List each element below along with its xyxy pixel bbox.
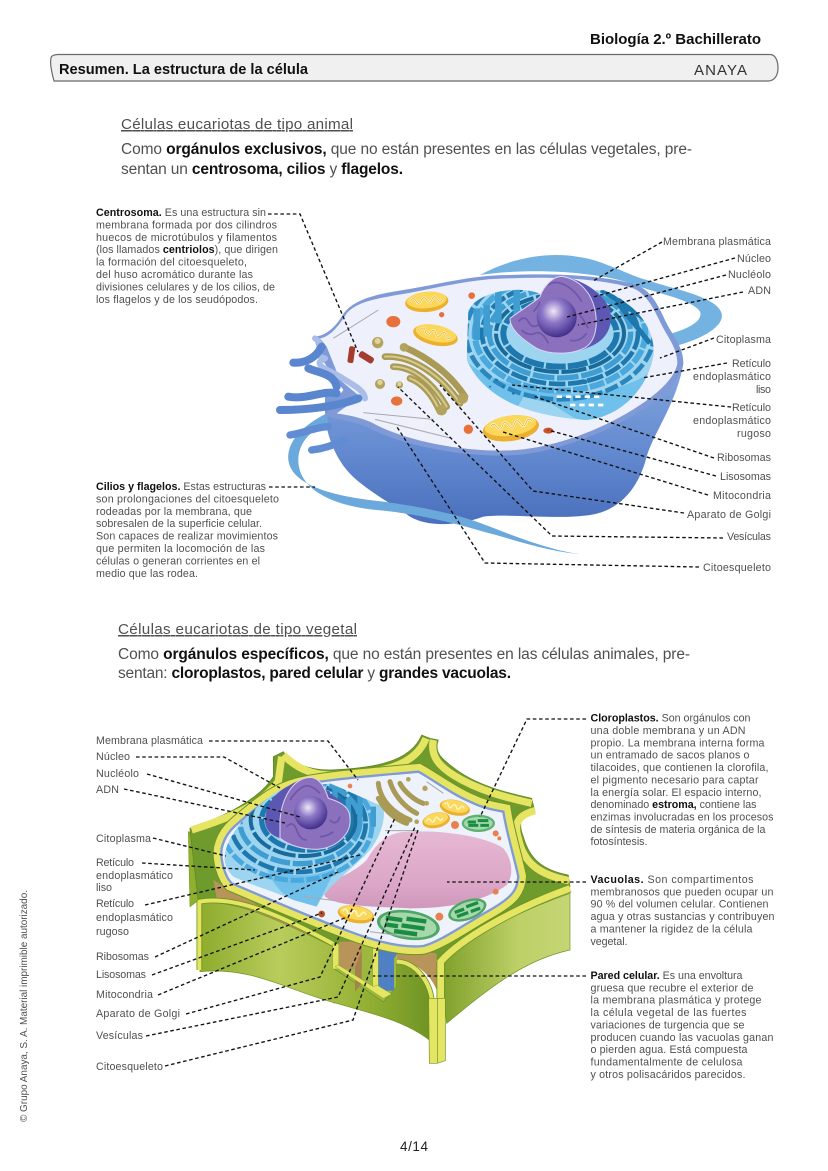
text block: cloroplastos: el pigmento necesario para captar	[590, 774, 759, 786]
text block: pared celular: la célula vegetal de las fuertes	[590, 1007, 746, 1019]
text block: cilios y flagelos: células o generan corrientes en el	[96, 555, 260, 567]
text block: vacuolas: 90 % del volumen celular. Contienen	[590, 899, 769, 911]
text block: cilios y flagelos: sobresalen de la superficie celular.	[96, 518, 262, 530]
illustration: plant cell	[188, 735, 570, 1063]
text block: cloroplastos: de síntesis de materia orgánica de la	[590, 824, 766, 836]
intro text: animal cells	[121, 141, 692, 178]
labels: animal cell: Núcleo	[737, 253, 771, 265]
chloroplasts	[375, 815, 495, 944]
cytoskeleton	[303, 782, 443, 937]
notch in wall	[333, 940, 407, 998]
labels: animal cell: Mitocondria	[713, 490, 771, 502]
olive backing behind notch	[333, 943, 397, 1003]
labels: plant cell: Ribosomas	[96, 951, 149, 963]
text block: pared celular: gruesa que recubre el exterior de	[590, 982, 754, 994]
labels: plant cell: Lisosomas	[96, 969, 146, 981]
nucleus	[265, 777, 350, 849]
labels: animal cell: endoplasmático	[693, 371, 771, 383]
text block: cilios y flagelos: Cilios y flagelos. Estas estructuras	[96, 481, 266, 493]
text block: cloroplastos: enzimas involucradas en los procesos	[590, 812, 774, 824]
text block: vacuolas: agua y otras sustancias y contribuyen	[590, 911, 775, 923]
vacuole	[323, 831, 511, 908]
header bar: Resumen. La estructura de la célula	[59, 62, 309, 78]
text block: vacuolas: membranosos que pueden ocupar un	[590, 886, 774, 898]
nucleus	[510, 277, 611, 353]
text block: centrosoma: (los llamados centriolos), que dirigen	[96, 244, 278, 256]
labels: plant cell: Retículo	[96, 857, 134, 869]
golgi apparatus	[385, 347, 465, 412]
labels: plant cell: endoplasmático	[96, 912, 173, 924]
text block: cloroplastos: tilacoides, que contienen la clorofila,	[590, 762, 769, 774]
front left panel	[198, 902, 430, 1040]
text block: vacuolas: Vacuolas. Son compartimentos	[590, 874, 754, 886]
header bar: ANAYA	[694, 62, 747, 79]
text block: centrosoma: los flagelos y de los seudópodos.	[96, 294, 258, 306]
text block: cloroplastos: una doble membrana y un ADN	[590, 725, 746, 737]
labels: animal cell: Aparato de Golgi	[687, 509, 771, 521]
heading: animal cells: Células eucariotas de tipo animal	[121, 116, 353, 133]
labels: plant cell: Citoplasma	[96, 833, 151, 845]
labels: animal cell: rugoso	[737, 428, 771, 440]
brown middle lamella	[213, 880, 437, 990]
labels: plant cell: Nucléolo	[96, 768, 139, 780]
copyright note: © Grupo Anaya, S. A. Material imprimible autorizado.	[19, 890, 30, 1122]
mitochondria	[336, 797, 471, 926]
labels: animal cell: Nucléolo	[728, 269, 771, 281]
labels: animal cell: liso	[756, 384, 771, 396]
labels: animal cell: Retículo	[732, 358, 771, 370]
page number: 4/14	[400, 1139, 428, 1154]
labels: plant cell: Núcleo	[96, 751, 130, 763]
labels: animal cell: Membrana plasmática	[663, 236, 771, 248]
text block: cilios y flagelos: son prolongaciones del citoesqueleto	[96, 493, 279, 505]
labels: animal cell: Lisosomas	[720, 471, 771, 483]
golgi apparatus	[378, 782, 423, 823]
text block: centrosoma: del huso acromático durante las	[96, 269, 253, 281]
text block: cilios y flagelos: Son capaces de realizar movimientos	[96, 531, 278, 543]
text block: pared celular: producen cuando las vacuolas ganan	[590, 1032, 774, 1044]
text block: pared celular: fundamentalmente de celulosa	[590, 1056, 743, 1068]
labels: animal cell: endoplasmático	[693, 415, 771, 427]
labels: plant cell: ADN	[96, 784, 119, 796]
page header: subject: Biología 2.º Bachillerato	[590, 31, 761, 48]
text block: pared celular: variaciones de turgencia que se	[590, 1019, 745, 1031]
text block: cilios y flagelos: rodeadas por la membrana, que	[96, 506, 252, 518]
text block: cloroplastos	[590, 713, 774, 848]
text block: cilios y flagelos: medio que las rodea.	[96, 568, 198, 580]
lysosomes and ribosomes	[318, 784, 501, 921]
text block: vacuolas: vegetal.	[590, 936, 628, 948]
text block: cloroplastos: denominado estroma, contiene las	[590, 799, 756, 811]
labels: animal cell: ADN	[748, 285, 771, 297]
front right panel	[440, 893, 570, 1023]
text block: centrosoma: membrana formada por dos cilindros	[96, 219, 277, 231]
leader lines: plant cell	[124, 719, 586, 1066]
text block: cilios y flagelos: que permiten la locomoción de las	[96, 543, 265, 555]
mitochondria	[404, 290, 541, 445]
text block: cloroplastos: un entramado de sacos planos o	[590, 750, 750, 762]
labels: plant cell: Retículo	[96, 898, 134, 910]
plasma membrane and cell interior	[221, 772, 518, 946]
labels: plant cell: Citoesqueleto	[96, 1061, 163, 1073]
leader lines: animal cell	[268, 214, 743, 567]
intro text: plant cells: sentan: cloroplastos, pared celular y grandes vacuolas.	[118, 665, 511, 682]
labels: animal cell: Vesículas	[727, 531, 771, 543]
lysosomes	[386, 292, 553, 434]
labels: plant cell: Mitocondria	[96, 989, 153, 1001]
endoplasmic reticulum	[224, 784, 384, 906]
intro text: plant cells	[118, 646, 690, 682]
text block: centrosoma: la formación del citoesqueleto,	[96, 257, 247, 269]
text block: centrosoma	[96, 207, 278, 306]
labels: animal cell: Ribosomas	[717, 452, 771, 464]
labels: plant cell: Vesículas	[96, 1030, 143, 1042]
cilia	[280, 338, 365, 410]
labels: plant cell: endoplasmático	[96, 870, 173, 882]
cytoskeleton	[333, 310, 452, 438]
text block: vacuolas: a mantener la rigidez de la célula	[590, 923, 753, 935]
text block: pared celular	[590, 970, 774, 1081]
endoplasmic reticulum	[466, 290, 654, 420]
text block: cloroplastos: la energía solar. El espacio interno,	[590, 787, 762, 799]
intro text: animal cells: Como orgánulos exclusivos, que no están presentes en las células vegetales, pre-	[121, 141, 692, 158]
left side panel	[188, 832, 218, 907]
text block: pared celular: o pierden agua. Está compuesta	[590, 1044, 748, 1056]
labels: plant cell: Membrana plasmática	[96, 735, 203, 747]
front wall yellow edges	[199, 888, 570, 998]
illustration: animal cell	[280, 255, 722, 554]
text block: cilios y flagelos	[96, 481, 279, 580]
top face of wall	[190, 735, 570, 960]
labels: plant cell: rugoso	[96, 926, 129, 938]
text block: cloroplastos: fotosíntesis.	[590, 836, 648, 848]
text block: pared celular: Pared celular. Es una envoltura	[590, 970, 743, 982]
text block: centrosoma: Centrosoma. Es una estructura sin	[96, 207, 266, 219]
labels: plant cell	[96, 735, 203, 1073]
text block: centrosoma: divisiones celulares y de los cilios, de	[96, 281, 275, 293]
text block: cloroplastos: Cloroplastos. Son orgánulos con	[590, 713, 751, 725]
labels: animal cell: Citoplasma	[716, 334, 771, 346]
labels: plant cell: Aparato de Golgi	[96, 1008, 180, 1020]
intro text: animal cells: sentan un centrosoma, cilios y flagelos.	[121, 161, 403, 178]
heading: plant cells: Células eucariotas de tipo vegetal	[118, 621, 357, 638]
header bar	[51, 54, 778, 81]
labels: plant cell: liso	[96, 882, 112, 894]
labels: animal cell: Retículo	[732, 402, 771, 414]
labels: animal cell: Citoesqueleto	[703, 562, 771, 574]
text block: pared celular: la membrana plasmática y protege	[590, 995, 762, 1007]
text block: vacuolas	[590, 874, 775, 948]
text block: centrosoma: huecos de microtúbulos y filamentos	[96, 232, 277, 244]
intro text: plant cells: Como orgánulos específicos, que no están presentes en las células animales, pre-	[118, 646, 690, 663]
centrioles	[347, 346, 375, 364]
text block: cloroplastos: propio. La membrana interna forma	[590, 737, 765, 749]
labels: animal cell	[663, 236, 771, 574]
text block: pared celular: y otros polisacáridos parecidos.	[590, 1069, 746, 1081]
